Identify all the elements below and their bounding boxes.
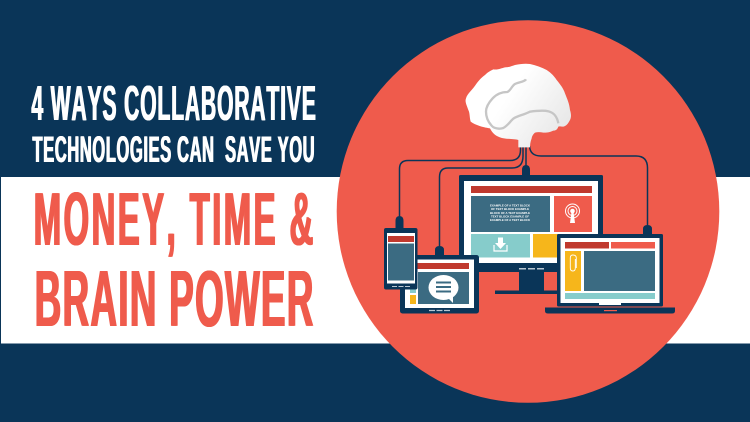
monitor sample text (490, 204, 530, 222)
monitor chin buttons (519, 268, 544, 270)
headline line 1: MONEY, TIME & (32, 177, 315, 261)
icon: paperclip (570, 255, 576, 271)
monitor sample text: EXAMPLE OF A TEXT BLOCK (490, 218, 530, 222)
device: monitor (459, 165, 603, 294)
monitor sample text: BLOCK OF A TEXT EXAMPLE (490, 211, 530, 215)
monitor sample text: TEXT BLOCK EXAMPLE OF (491, 214, 529, 218)
monitor sample text: EXAMPLE OF A TEXT BLOCK (490, 204, 530, 208)
title line 2: TECHNOLOGIES CAN SAVE YOU (32, 128, 315, 170)
monitor sample text: OF TEXT BLOCK EXAMPLE (491, 207, 529, 211)
icon: download (494, 238, 507, 251)
connecting wires (400, 146, 648, 248)
white title band (1, 177, 750, 344)
laptop base (545, 308, 675, 314)
coral circle (337, 20, 719, 403)
device: tablet (400, 246, 479, 314)
phone chin buttons (392, 286, 410, 288)
monitor plug (522, 165, 530, 175)
device: laptop (545, 225, 675, 314)
headline line 2: BRAIN POWER (34, 254, 313, 343)
icon: broadcast signal (566, 204, 580, 223)
title line 1: 4 WAYS COLLABORATIVE (31, 76, 316, 130)
laptop plug (643, 225, 652, 234)
icon: brain (466, 64, 571, 147)
icon: speech bubble (428, 275, 458, 303)
tablet chin buttons (429, 310, 450, 312)
tablet plug (435, 246, 444, 255)
device: phone (384, 216, 418, 290)
phone plug (396, 216, 404, 228)
